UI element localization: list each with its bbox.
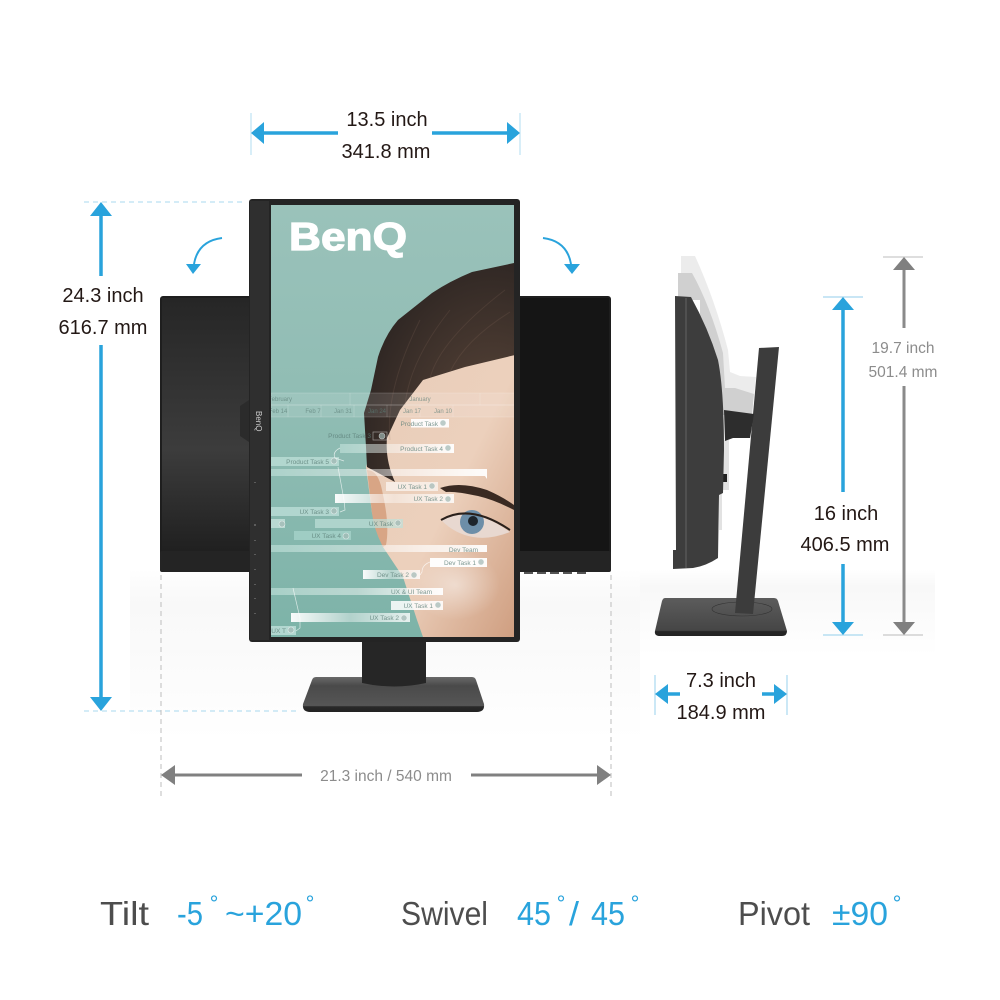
gantt bar labels: Product Task 5 <box>286 459 329 466</box>
height dimension: 24.3 inch: 616.7 mm <box>59 317 147 339</box>
gantt bar labels: UX Task 3 <box>299 509 329 516</box>
spec: swivel: 45 <box>517 895 551 932</box>
portrait monitor <box>249 199 520 712</box>
height dimension: 24.3 inch: 24.3 inch <box>62 285 144 307</box>
gantt chart overlay <box>268 393 515 635</box>
spec: swivel: / <box>569 895 580 932</box>
spec: tilt: -5 <box>177 895 203 932</box>
gantt bar labels: Dev Task 1 <box>444 560 476 567</box>
landscape monitor behind <box>160 296 611 573</box>
height dimension: 19.7 inch: 19.7 inch <box>872 340 934 357</box>
gantt bar labels: Dev Team <box>449 547 478 554</box>
gantt bar labels: Product Task <box>401 421 439 428</box>
gantt header labels: January <box>409 397 431 403</box>
bezel logo: BenQ <box>254 411 263 431</box>
floor shadow: front monitor <box>130 570 640 740</box>
side panel <box>673 296 724 569</box>
depth dimension: 7.3 inch: 184.9 mm <box>677 702 765 724</box>
gantt bar labels: Product Task 3 <box>328 433 371 440</box>
ghost lower part <box>719 440 729 530</box>
gantt bar labels <box>271 421 478 635</box>
gantt bar labels: Product Task 4 <box>400 446 443 453</box>
spec: swivel: 45 <box>591 895 625 932</box>
spec: tilt: ° <box>306 891 314 916</box>
width dimension: 13.5 inch <box>251 109 520 163</box>
gantt bar labels: UX & UI Team <box>391 589 432 596</box>
depth dimension: 7.3 inch <box>655 670 787 724</box>
height dimension: 16 inch: 16 inch <box>814 503 878 525</box>
bezel control dots <box>254 482 256 614</box>
gantt header labels: Jan 17 <box>403 409 422 415</box>
spec: tilt: ~+20 <box>225 895 302 932</box>
gantt bar labels: UX Task 4 <box>311 533 341 540</box>
hair <box>364 263 515 482</box>
spec: tilt: ° <box>210 891 218 916</box>
spec: tilt <box>100 891 314 932</box>
mid ghost panel <box>678 273 754 415</box>
gantt header labels: Feb 14 <box>269 409 288 415</box>
height dimension: 24.3 inch <box>59 202 300 711</box>
gantt badges <box>279 420 484 633</box>
gantt bar labels: UX Task 2 <box>369 615 399 622</box>
width dimension: 13.5 inch: 341.8 mm <box>342 141 430 163</box>
width dimension: 21.3 inch <box>161 575 611 796</box>
side panel seam <box>685 298 687 568</box>
BenQ screen logo: BenQ <box>289 216 407 259</box>
depth dimension: 7.3 inch: 7.3 inch <box>686 670 756 692</box>
gantt bars <box>271 419 487 635</box>
ear <box>367 470 387 547</box>
gantt bar labels: UX Task 1 <box>403 603 433 610</box>
spec: swivel: ° <box>557 891 565 916</box>
side hinge button <box>723 474 727 482</box>
spec: swivel: Swivel <box>401 895 488 932</box>
gantt header <box>271 393 515 417</box>
width dimension: 21.3 inch: 21.3 inch / 540 mm <box>320 768 452 785</box>
screen <box>268 205 515 637</box>
gantt bar labels: UX Task 2 <box>413 496 443 503</box>
pupil <box>468 516 478 526</box>
spec: pivot: ±90 <box>832 895 888 932</box>
cheek highlight <box>422 567 492 613</box>
spec: swivel: ° <box>631 891 639 916</box>
iris <box>460 510 484 534</box>
floor shadow: side monitor <box>640 570 935 655</box>
gantt header labels: Jan 31 <box>334 409 353 415</box>
gantt header labels: Jan 24 <box>368 409 387 415</box>
gantt header labels: February <box>268 397 292 403</box>
gantt header labels <box>271 396 452 413</box>
height dimension: 19.7 inch <box>869 257 937 635</box>
gantt header labels: Feb 7 <box>305 409 321 415</box>
left bezel strip <box>250 201 269 640</box>
monitor bezel <box>249 199 520 642</box>
gantt bar labels: UX Task 1 <box>397 484 427 491</box>
gantt bar labels: UX Task <box>369 521 394 528</box>
gantt bar labels: Dev Task 2 <box>377 572 409 579</box>
hair strands <box>389 290 510 440</box>
light ghost panel <box>681 256 756 415</box>
gantt header labels: Jan 10 <box>434 409 453 415</box>
gantt connectors <box>293 448 430 631</box>
height dimension: 16 inch: 406.5 mm <box>801 534 889 556</box>
side stand base <box>655 598 787 636</box>
face skin <box>366 340 515 637</box>
left pivot arrow <box>186 238 222 274</box>
spec: pivot: Pivot <box>738 895 810 932</box>
width dimension: 13.5 inch: 13.5 inch <box>346 109 428 131</box>
eye lash <box>441 513 510 530</box>
spec: swivel <box>401 891 639 932</box>
eye white <box>441 514 510 538</box>
monitor stand base <box>303 677 484 712</box>
side hinge arm <box>724 410 754 441</box>
monitor stand neck <box>362 640 426 686</box>
side stand column <box>735 347 779 614</box>
spec: pivot: ° <box>893 891 901 916</box>
height dimension: 16 inch <box>801 297 889 635</box>
gantt bar labels: UX T <box>271 628 286 635</box>
eyebrow <box>440 485 514 510</box>
side view monitor <box>655 256 787 636</box>
spec: pivot <box>738 891 901 932</box>
base ring <box>712 602 772 616</box>
height dimension: 19.7 inch: 501.4 mm <box>869 364 937 381</box>
spec: tilt: Tilt <box>100 895 149 932</box>
right pivot arrow <box>543 238 580 274</box>
